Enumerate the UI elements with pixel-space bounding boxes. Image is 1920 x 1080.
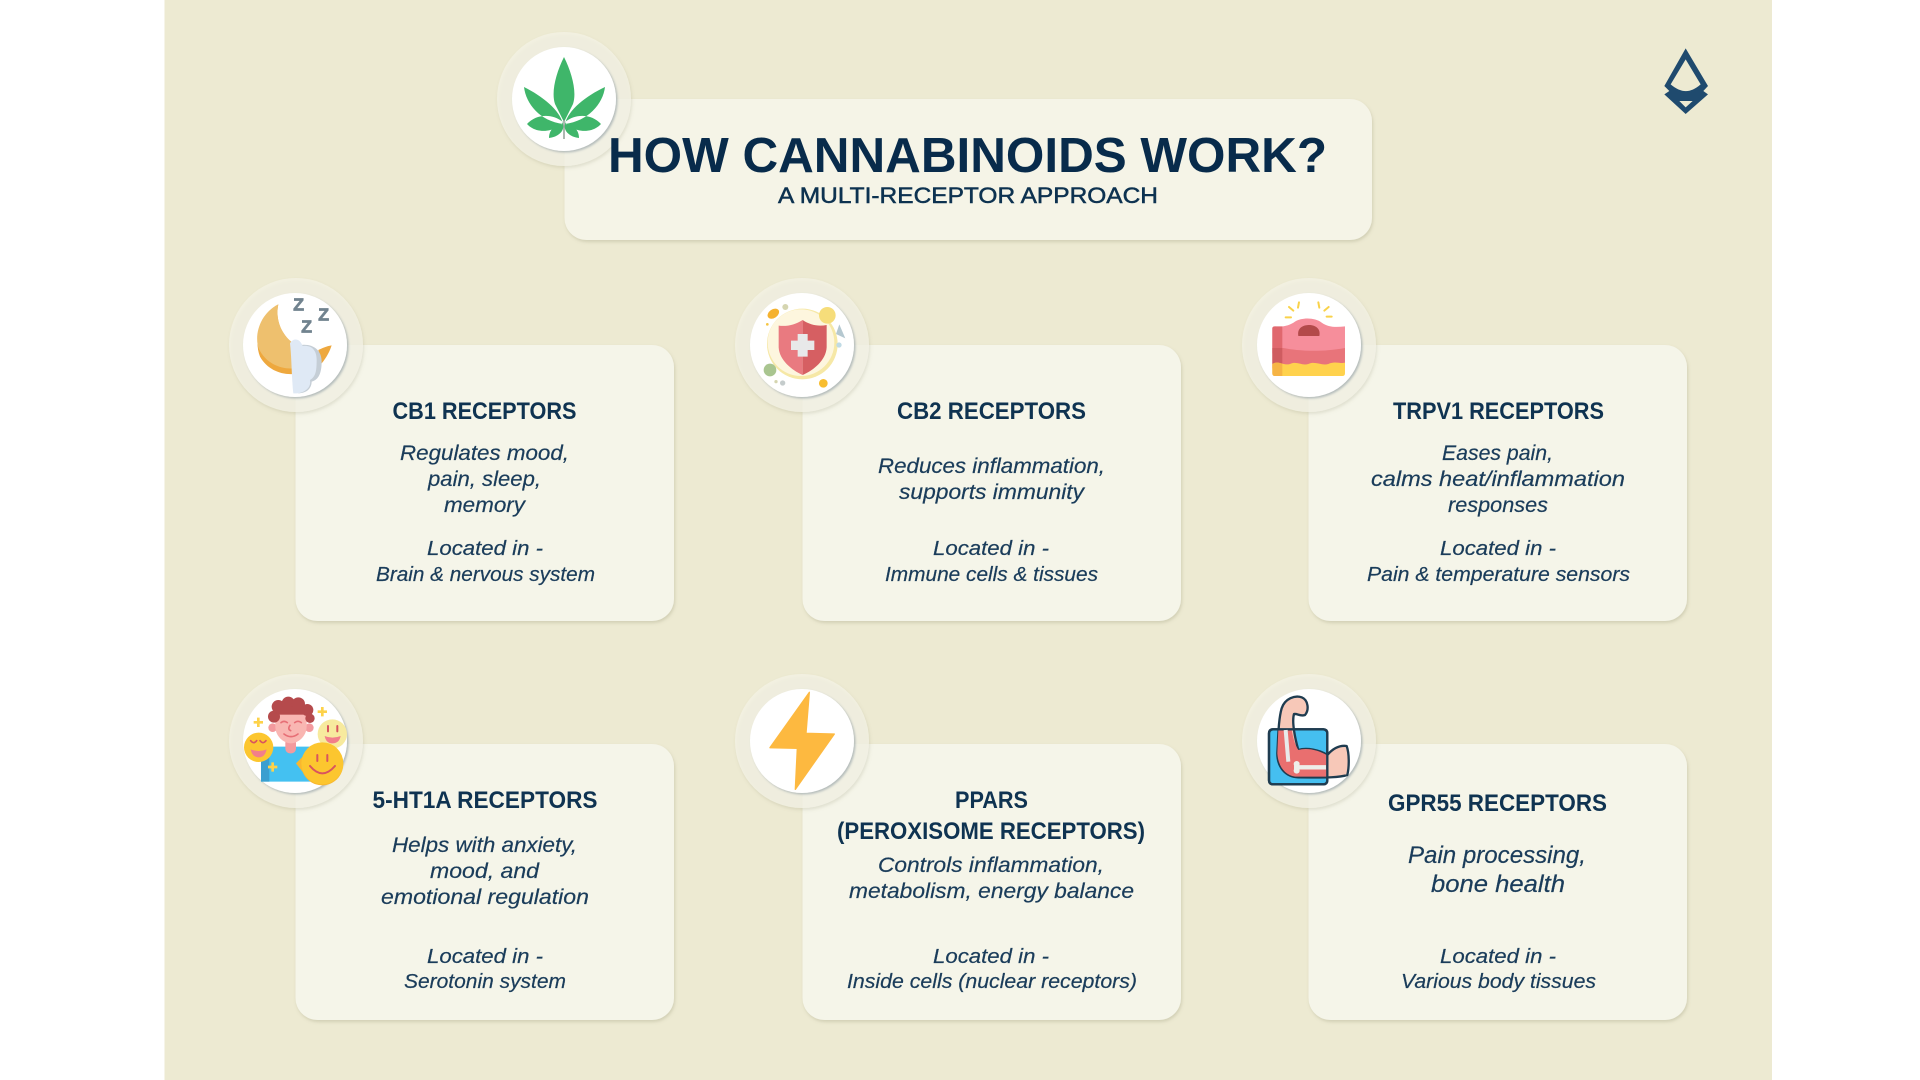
- heading: 5-HT1A RECEPTORS: [372, 787, 598, 814]
- title: HOW CANNABINOIDS WORK?: [608, 129, 1327, 183]
- function text: [1371, 442, 1625, 517]
- icon: cannabis leaf: [497, 32, 631, 166]
- panel: CB2 receptors: [735, 278, 1181, 621]
- heading: PPARS: [955, 787, 1028, 814]
- heading: CB1 RECEPTORS: [392, 398, 576, 425]
- icon: arm x-ray: [1242, 674, 1376, 808]
- location text: Located in -: [427, 538, 543, 560]
- location text: [847, 946, 1137, 993]
- icon: immune shield: [735, 278, 869, 412]
- location text: [885, 538, 1098, 586]
- icon: sleeping moon: Z: [293, 295, 304, 315]
- location text: Serotonin system: [404, 971, 566, 993]
- panel: CB1 receptors: [229, 278, 674, 621]
- icon: inflamed skin: [1242, 278, 1376, 412]
- function text: [381, 834, 589, 909]
- location text: [376, 538, 595, 586]
- heading: GPR55 RECEPTORS: [1388, 790, 1607, 817]
- header: [497, 32, 1372, 240]
- function text: emotional regulation: [381, 886, 589, 909]
- location text: Various body tissues: [1401, 971, 1596, 993]
- card background: [296, 744, 674, 1020]
- location text: Pain & temperature sensors: [1367, 564, 1630, 586]
- function text: [849, 854, 1134, 903]
- heading: (PEROXISOME RECEPTORS): [837, 818, 1145, 845]
- card background: [296, 345, 674, 621]
- function text: calms heat/inflammation: [1371, 468, 1625, 491]
- function text: supports immunity: [899, 481, 1086, 504]
- icon: sleeping moon: [229, 278, 363, 412]
- card background: [802, 744, 1181, 1020]
- panel: TRPV1 receptors: [1242, 278, 1687, 621]
- function text: Eases pain,: [1442, 442, 1553, 465]
- function text: [400, 442, 569, 517]
- function text: metabolism, energy balance: [849, 880, 1134, 903]
- location text: Located in -: [1440, 946, 1556, 968]
- icon: lightning bolt: [735, 674, 869, 808]
- location text: [404, 946, 566, 993]
- location text: Brain & nervous system: [376, 564, 595, 586]
- heading: TRPV1 RECEPTORS: [1393, 398, 1604, 425]
- function text: memory: [444, 494, 527, 517]
- panel: GPR55 receptors: [1242, 674, 1687, 1020]
- location text: Located in -: [933, 946, 1049, 968]
- function text: Helps with anxiety,: [392, 834, 577, 857]
- panel: 5-HT1A receptors: [229, 674, 674, 1020]
- function text: mood, and: [430, 860, 540, 883]
- function text: bone health: [1431, 871, 1565, 898]
- panel: PPARs: [735, 674, 1181, 1020]
- function text: [878, 455, 1105, 504]
- function text: [1408, 842, 1586, 898]
- function text: Controls inflammation,: [878, 854, 1104, 877]
- location text: Immune cells & tissues: [885, 564, 1098, 586]
- title card: [564, 99, 1372, 240]
- function text: responses: [1448, 494, 1549, 517]
- icon: happy person: [229, 674, 363, 808]
- function text: Regulates mood,: [400, 442, 569, 465]
- location text: Located in -: [933, 538, 1049, 560]
- card background: [802, 345, 1181, 621]
- card background: [1308, 345, 1687, 621]
- icon: sleeping moon: Z: [318, 305, 329, 325]
- logo: [1664, 48, 1708, 114]
- icon: sleeping moon: Z: [301, 317, 312, 337]
- function text: Pain processing,: [1408, 842, 1586, 869]
- heading: [837, 787, 1145, 845]
- function text: Reduces inflammation,: [878, 455, 1105, 478]
- function text: pain, sleep,: [427, 468, 541, 491]
- location text: [1367, 538, 1630, 586]
- location text: [1401, 946, 1596, 993]
- heading: CB2 RECEPTORS: [897, 398, 1086, 425]
- card background: [1308, 744, 1687, 1020]
- subtitle: A MULTI-RECEPTOR APPROACH: [778, 183, 1158, 208]
- location text: Located in -: [427, 946, 543, 968]
- location text: Inside cells (nuclear receptors): [847, 971, 1137, 993]
- location text: Located in -: [1440, 538, 1556, 560]
